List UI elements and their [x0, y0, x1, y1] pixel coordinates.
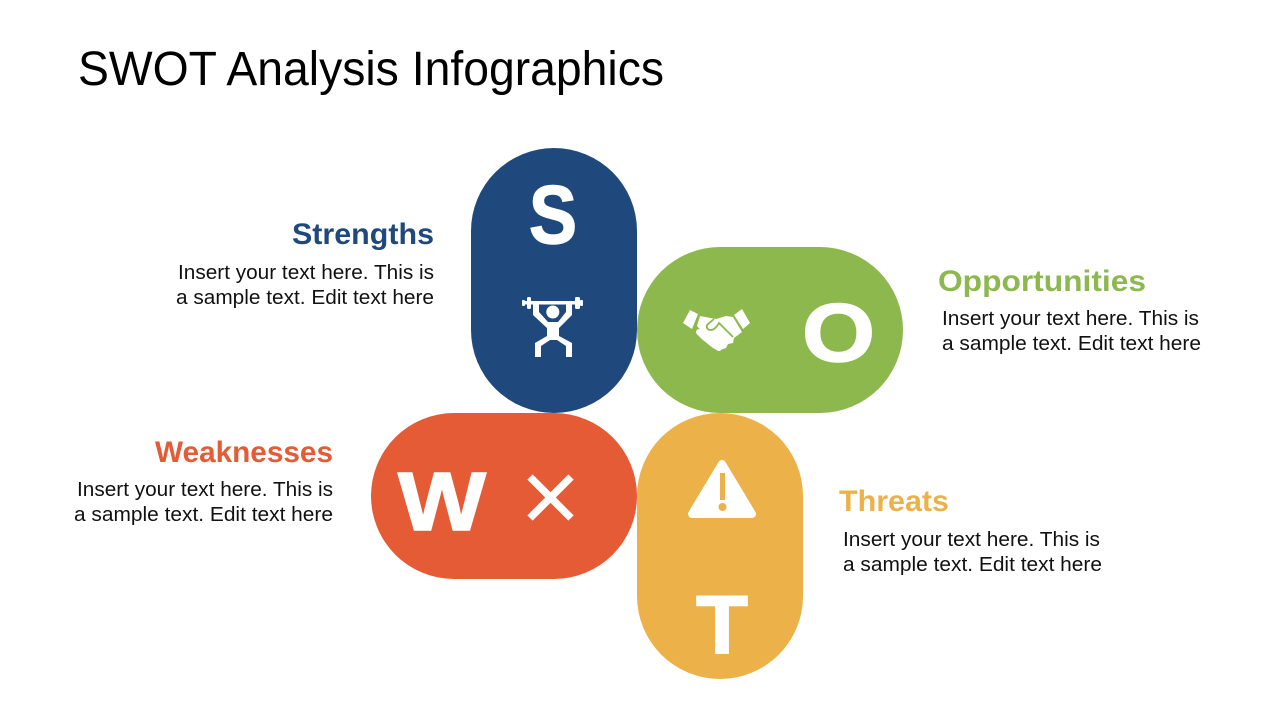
panel: weaknesses pill	[371, 413, 637, 579]
icon: warning triangle	[692, 464, 752, 514]
text block: threats: Threats	[839, 485, 949, 518]
letter S: S	[529, 168, 577, 261]
panel: strengths pill	[471, 148, 637, 413]
text block: threats: Insert your text here. This is	[843, 529, 1100, 551]
text block: threats: a sample text. Edit text here	[843, 554, 1102, 576]
text block: opportunities	[938, 265, 1201, 355]
text block: opportunities: a sample text. Edit text here	[942, 333, 1201, 355]
text block: strengths: Insert your text here. This is	[178, 262, 434, 284]
icon: handshake	[683, 309, 750, 350]
text block: strengths: a sample text. Edit text here	[176, 287, 434, 309]
panel: threats pill	[637, 413, 803, 679]
text block: weaknesses	[74, 436, 333, 526]
text block: opportunities: Opportunities	[938, 265, 1146, 298]
text block: weaknesses: Insert your text here. This is	[77, 479, 333, 501]
letter O: O	[802, 286, 875, 379]
text block: strengths	[176, 218, 434, 309]
text block: strengths: Strengths	[292, 218, 434, 251]
icon: cross	[530, 477, 571, 518]
letter W: W	[398, 455, 487, 548]
letter T: T	[696, 578, 748, 671]
icon: weightlifter	[522, 297, 583, 357]
text block: weaknesses: Weaknesses	[155, 436, 333, 469]
text block: threats	[839, 485, 1102, 576]
title: SWOT Analysis Infographics	[78, 43, 664, 96]
text block: weaknesses: a sample text. Edit text here	[74, 504, 333, 526]
text block: opportunities: Insert your text here. This is	[942, 308, 1199, 330]
panel: opportunities pill	[637, 247, 903, 413]
